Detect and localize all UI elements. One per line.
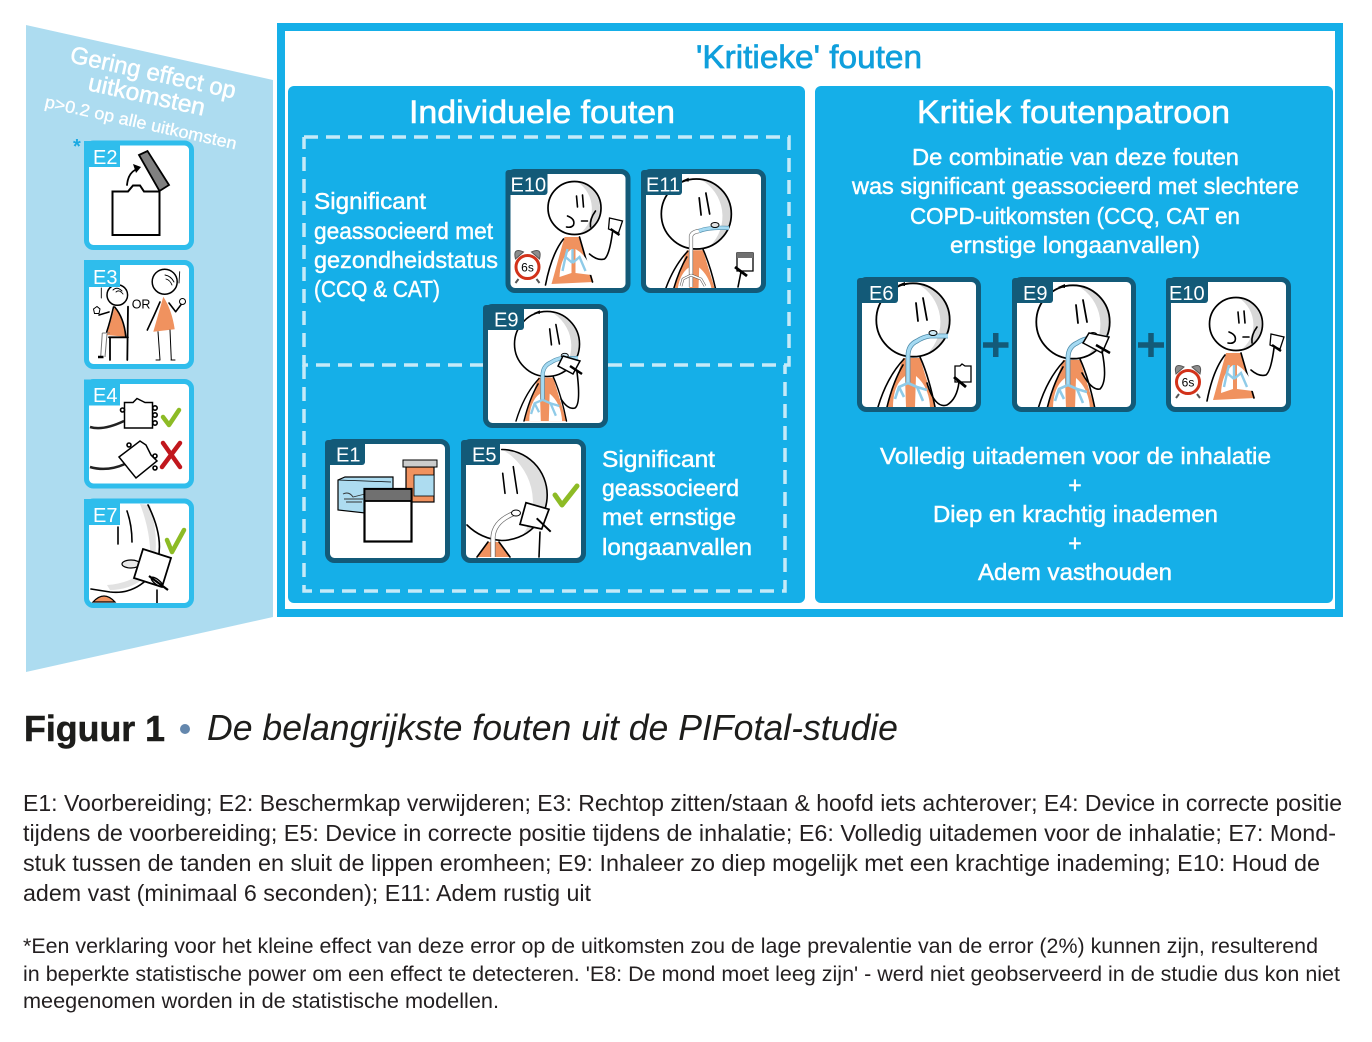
card E2: beschermkap verwijderen: E2 bbox=[93, 147, 117, 169]
legend text: foutcodes: tijdens de voorbereiding; E5: Device in correcte positie tijdens de inhalatie; E6: Volledig uitademen voor de inhalatie; E7: Mond- bbox=[23, 820, 1336, 846]
card E3: rechtop zitten of staan bbox=[84, 260, 192, 366]
card E5: device tijdens inhalatie bbox=[461, 440, 584, 560]
card E4: device in correcte positie: E4 bbox=[93, 385, 117, 407]
text: beschrijving bbox=[851, 144, 1299, 258]
panel: gering effect op uitkomsten bbox=[26, 25, 273, 672]
text: beschrijving: was significant geassocieerd met slechtere bbox=[851, 173, 1299, 199]
heading: individuele fouten: Individuele fouten bbox=[409, 94, 675, 130]
text: foutenpatroon samenvatting: + bbox=[1068, 472, 1082, 498]
card E9: diep inademen: E9 bbox=[494, 310, 518, 332]
footnote bbox=[23, 934, 1340, 1013]
card E11: rustig uitademen: E11 bbox=[646, 174, 680, 196]
text: gezondheidstatus bbox=[314, 188, 498, 302]
text: foutenpatroon samenvatting: Diep en krachtig inademen bbox=[933, 501, 1218, 527]
card E10: adem vasthouden: E10 bbox=[510, 174, 546, 196]
card E6: volledig uitademen: E6 bbox=[869, 283, 893, 305]
card E9: krachtig inademen: E9 bbox=[1023, 283, 1047, 305]
text: ernstige longaanvallen: geassocieerd bbox=[602, 475, 739, 501]
panel: kritiek foutenpatroon bbox=[815, 86, 1333, 603]
figure caption: De belangrijkste fouten uit de PIFotal-studie bbox=[207, 707, 898, 748]
legend text: foutcodes bbox=[23, 790, 1342, 906]
card E3: rechtop zitten of staan: OR bbox=[132, 297, 150, 311]
heading: kritiek foutenpatroon: Kritiek foutenpatroon bbox=[917, 94, 1230, 130]
heading: uitkomsten: uitkomsten bbox=[86, 69, 208, 122]
text: beschrijving: ernstige longaanvallen) bbox=[950, 232, 1200, 258]
card E10: vasthouden: E10 bbox=[1169, 283, 1205, 305]
text: beschrijving: COPD-uitkomsten (CCQ, CAT en bbox=[910, 203, 1240, 229]
card E3: rechtop zitten of staan: E3 bbox=[93, 267, 117, 289]
card E6: volledig uitademen bbox=[857, 278, 978, 410]
legend text: foutcodes: adem vast (minimaal 6 seconden); E11: Adem rustig uit bbox=[23, 880, 592, 906]
card E2: beschermkap verwijderen bbox=[84, 141, 192, 248]
heading: gering effect: Gering effect op bbox=[68, 41, 239, 104]
footnote: meegenomen worden in de statistische modellen. bbox=[23, 989, 499, 1013]
text: ernstige longaanvallen: longaanvallen bbox=[602, 534, 752, 560]
figure caption: Figuur 1 bbox=[24, 708, 165, 749]
subheading: p-waarde: p>0.2 op alle uitkomsten bbox=[43, 92, 239, 153]
panel: kritieke fouten frame bbox=[281, 27, 1339, 613]
text: foutenpatroon samenvatting: Adem vasthouden bbox=[978, 559, 1172, 585]
text: foutenpatroon samenvatting bbox=[880, 443, 1271, 585]
card E1: voorbereiding bbox=[325, 440, 448, 560]
card E4: device in correcte positie bbox=[84, 380, 192, 486]
text: gezondheidstatus: geassocieerd met bbox=[314, 218, 494, 244]
card E5: device tijdens inhalatie: E5 bbox=[472, 444, 496, 466]
card E7: mondstuk tussen de tanden bbox=[84, 499, 192, 606]
legend text: foutcodes: E1: Voorbereiding; E2: Beschermkap verwijderen; E3: Rechtop zitten/staan & hoofd iets achterover; E4: Device in correcte positie bbox=[23, 790, 1342, 816]
card E9: krachtig inademen bbox=[1012, 278, 1134, 410]
text: ernstige longaanvallen bbox=[602, 446, 752, 560]
text: ernstige longaanvallen: Significant bbox=[602, 446, 716, 472]
card E9: diep inademen bbox=[483, 305, 606, 426]
card E10: adem vasthouden bbox=[506, 170, 628, 290]
text: beschrijving: De combinatie van deze fouten bbox=[912, 144, 1239, 170]
card E11: rustig uitademen bbox=[641, 170, 764, 297]
plus sign 1 bbox=[983, 333, 1008, 357]
card E7: mondstuk tussen de tanden: E7 bbox=[93, 505, 117, 527]
footnote: in beperkte statistische power om een effect te detecteren. 'E8: De mond moet leeg zijn' - werd niet geobserveerd in de studie dus kon niet bbox=[23, 962, 1340, 986]
text: gezondheidstatus: gezondheidstatus bbox=[314, 247, 498, 273]
legend text: foutcodes: stuk tussen de tanden en sluit de lippen eromheen; E9: Inhaleer zo diep mogelijk met een krachtige inademing; E10: Houd de bbox=[23, 850, 1320, 876]
card E10: vasthouden bbox=[1166, 278, 1288, 410]
card E1: voorbereiding: E1 bbox=[336, 444, 360, 466]
title: 'Kritieke' fouten bbox=[696, 39, 922, 75]
text: gezondheidstatus: Significant bbox=[314, 188, 427, 214]
footnote: *Een verklaring voor het kleine effect van deze error op de uitkomsten zou de lage prevalentie van de error (2%) kunnen zijn, resulterend bbox=[23, 934, 1318, 958]
text: foutenpatroon samenvatting: + bbox=[1068, 530, 1082, 556]
plus sign 2 bbox=[1138, 333, 1164, 357]
text: gezondheidstatus: (CCQ & CAT) bbox=[314, 276, 440, 302]
panel: individuele fouten bbox=[288, 86, 805, 603]
text: ernstige longaanvallen: met ernstige bbox=[602, 504, 736, 530]
footnote asterisk: * bbox=[73, 136, 81, 158]
text: foutenpatroon samenvatting: Volledig uitademen voor de inhalatie bbox=[880, 443, 1271, 469]
